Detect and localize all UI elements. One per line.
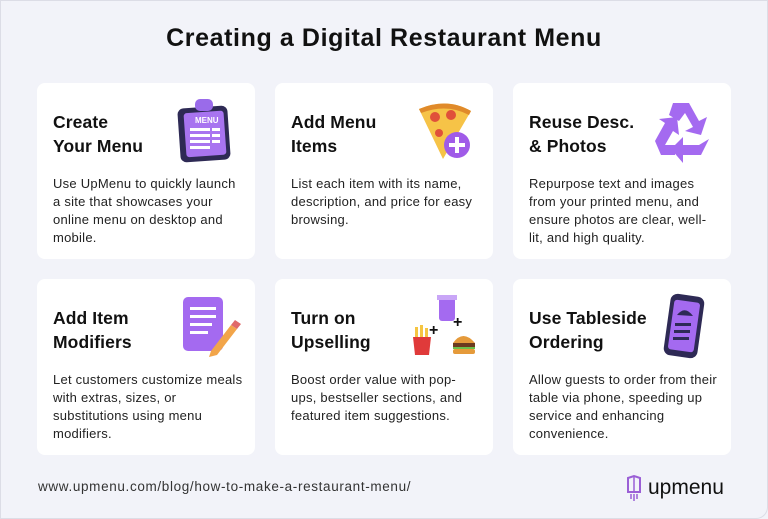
heading bbox=[529, 112, 634, 156]
description: Let customers customize meals with extras, sizes, or substitutions using menu modifiers. bbox=[53, 372, 242, 441]
icon: menu clipboard bbox=[178, 99, 230, 162]
panel: create your menu bbox=[37, 83, 255, 259]
panel: turn on upselling bbox=[275, 279, 493, 455]
heading: Turn on bbox=[291, 308, 356, 328]
title: Creating a Digital Restaurant Menu bbox=[166, 24, 602, 52]
description: Boost order value with pop-ups, bestseller sections, and featured item suggestions. bbox=[291, 372, 462, 423]
heading: Ordering bbox=[529, 332, 604, 352]
heading: Use Tableside bbox=[529, 308, 647, 328]
description: Use UpMenu to quickly launch a site that showcases your online menu on desktop and mobile. bbox=[53, 176, 236, 245]
heading bbox=[53, 112, 143, 156]
heading: Add Menu bbox=[291, 112, 376, 132]
logo: upmenu bbox=[627, 475, 724, 501]
icon: phone bbox=[664, 294, 704, 358]
heading: & Photos bbox=[529, 136, 607, 156]
heading: Upselling bbox=[291, 332, 371, 352]
description: Allow guests to order from their table via phone, speeding up service and enhancing convenience. bbox=[529, 372, 717, 441]
footer url: www.upmenu.com/blog/how-to-make-a-restaurant-menu/ bbox=[38, 479, 411, 494]
heading: Create bbox=[53, 112, 108, 132]
heading: Modifiers bbox=[53, 332, 132, 352]
heading bbox=[529, 308, 647, 352]
description: Repurpose text and images from your printed menu, and ensure photos are clear, well-lit, and high quality. bbox=[529, 176, 706, 245]
icon: fries drink burger: + bbox=[429, 322, 438, 339]
panel: reuse desc & photos bbox=[513, 83, 731, 259]
heading bbox=[291, 112, 376, 156]
icon: fries drink burger: + bbox=[453, 314, 462, 331]
heading: Your Menu bbox=[53, 136, 143, 156]
icon: menu clipboard: MENU bbox=[195, 116, 219, 125]
heading bbox=[291, 308, 371, 352]
heading: Add Item bbox=[53, 308, 129, 328]
logo: upmenu: upmenu bbox=[648, 476, 724, 499]
panel: add menu items bbox=[275, 83, 493, 259]
icon: recycle bbox=[655, 103, 709, 163]
heading: Reuse Desc. bbox=[529, 112, 634, 132]
heading: Items bbox=[291, 136, 337, 156]
icon: pizza plus bbox=[419, 104, 471, 159]
icon: notepad pencil bbox=[183, 297, 241, 357]
panel: tableside ordering bbox=[513, 279, 731, 455]
icon: fries drink burger bbox=[413, 295, 475, 355]
heading bbox=[53, 308, 132, 352]
panel: add item modifiers bbox=[37, 279, 255, 455]
description: List each item with its name, description, and price for easy browsing. bbox=[291, 176, 472, 227]
